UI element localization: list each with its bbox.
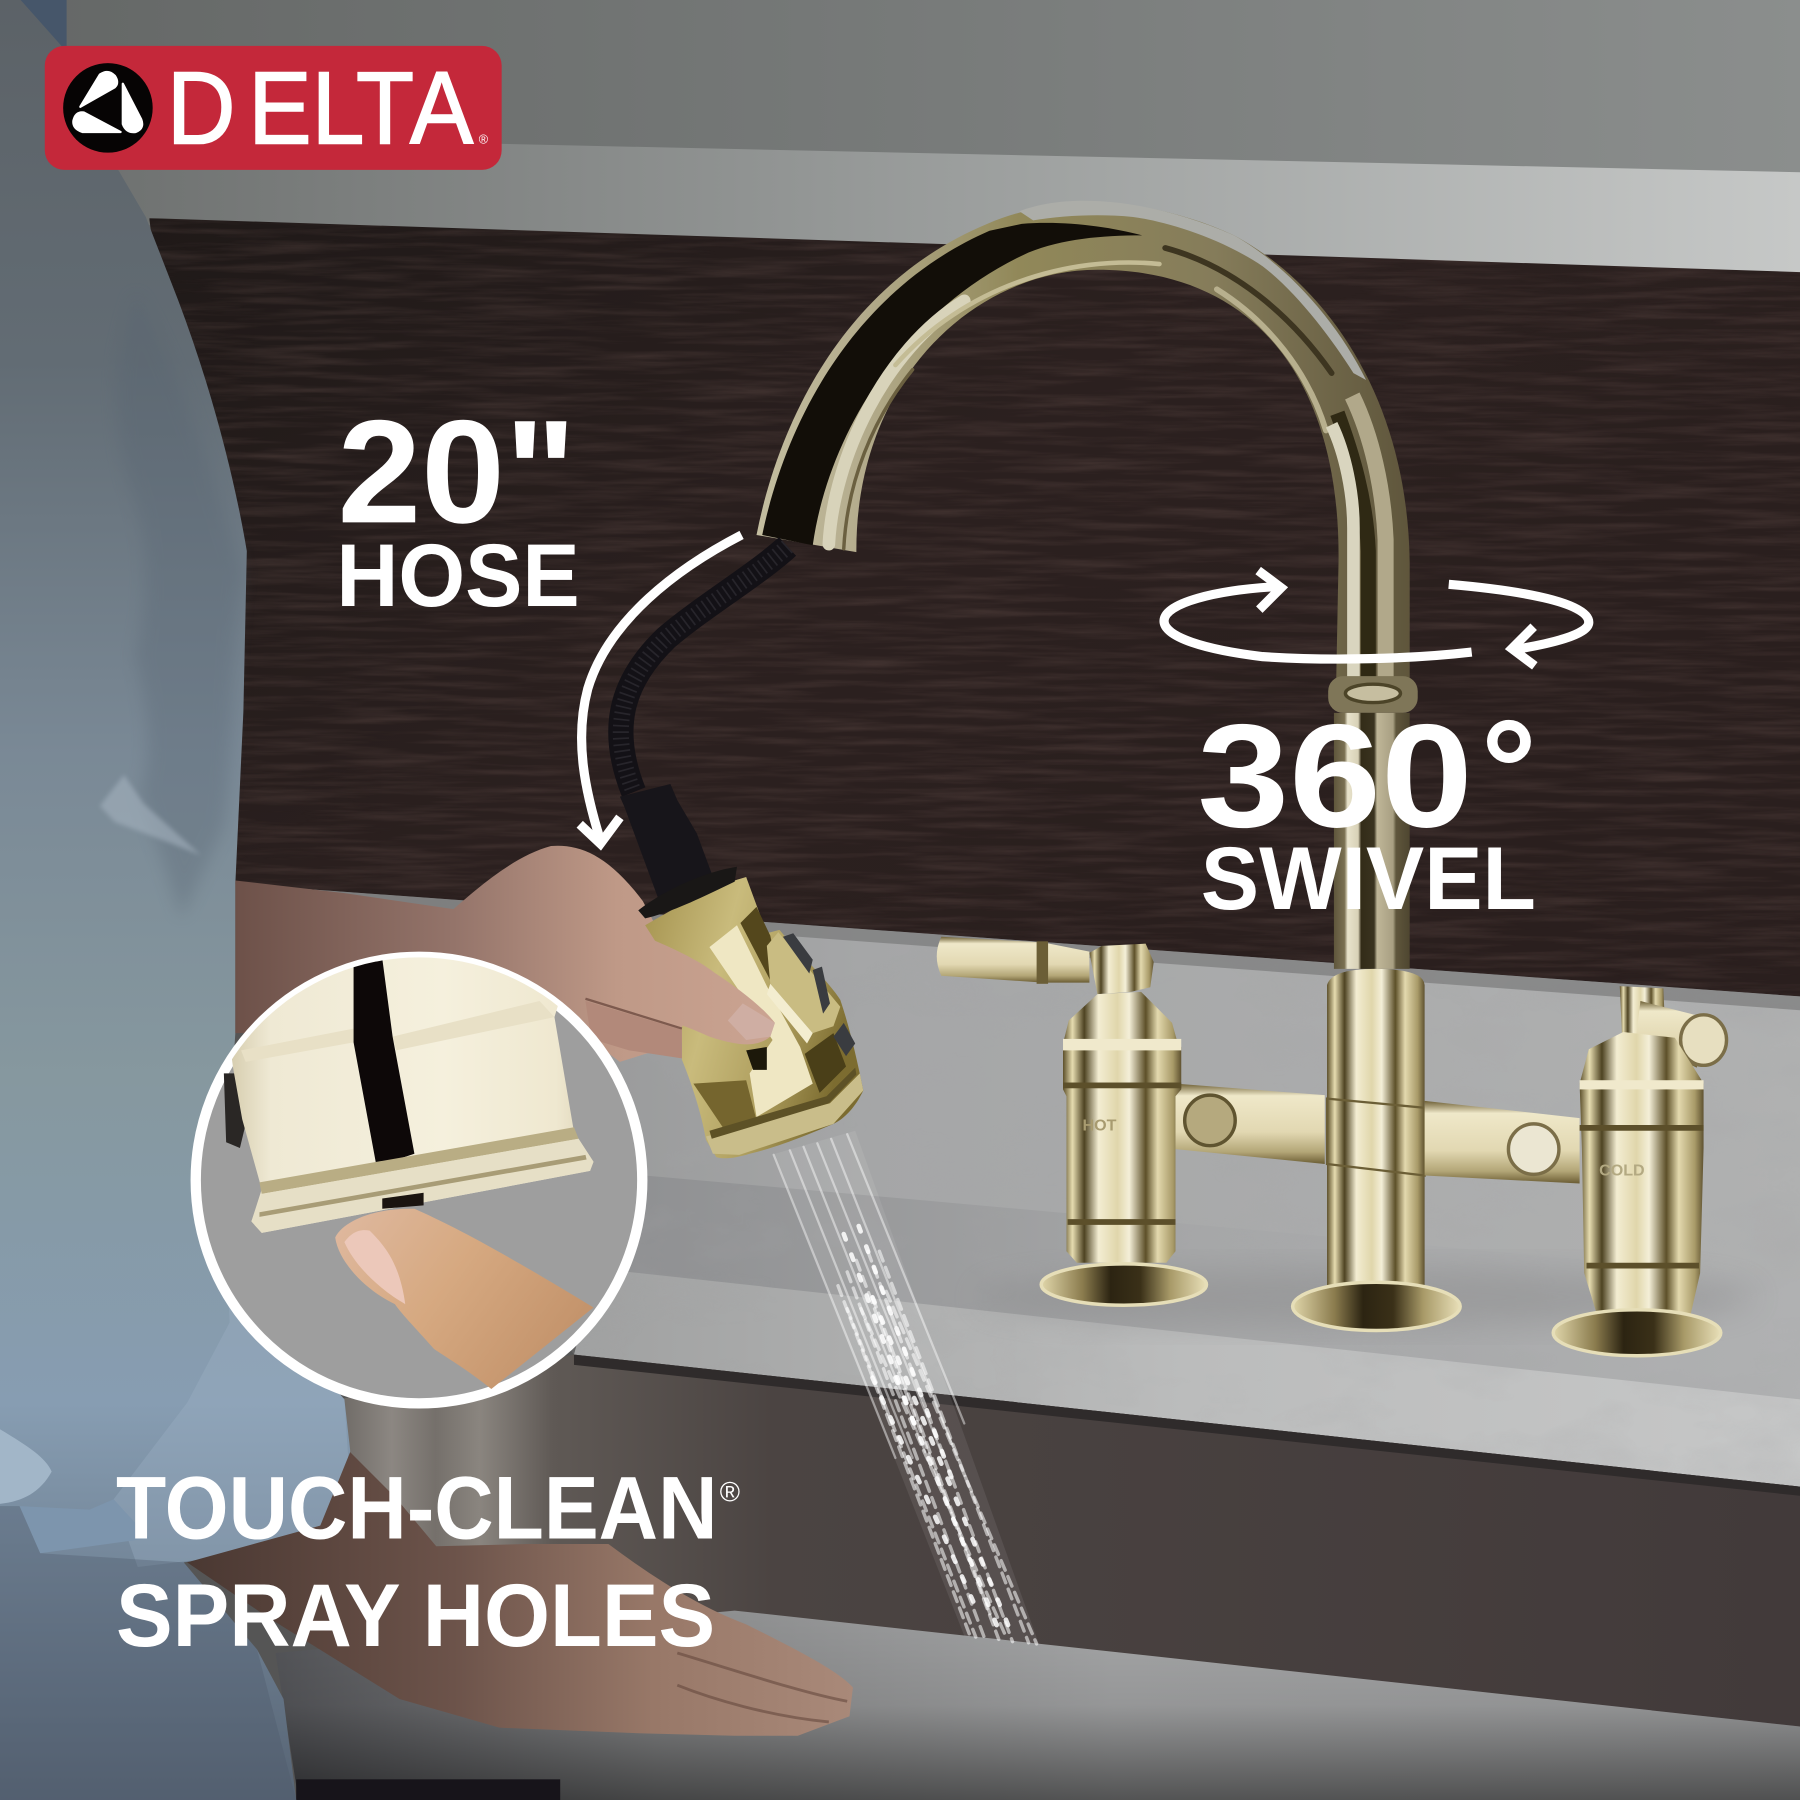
touch-clean detail circle bbox=[196, 953, 642, 1403]
faucet: right handle bbox=[1553, 986, 1727, 1356]
fingertip bbox=[335, 1209, 593, 1389]
background: steel sink bbox=[333, 1355, 1800, 1733]
upper column bbox=[1334, 713, 1410, 969]
close-up spray head bbox=[218, 953, 593, 1389]
sprayer collar disc bbox=[638, 867, 737, 918]
registered mark: ® bbox=[479, 132, 489, 146]
spout highlights bbox=[829, 248, 1332, 549]
label: 360 degree swivel: 360 bbox=[1197, 695, 1473, 859]
water spray bbox=[774, 1131, 1039, 1644]
arrow: 360 degree swivel bbox=[1164, 571, 1589, 666]
column clamp band bbox=[1327, 1099, 1425, 1176]
background: dark wood backsplash bbox=[149, 218, 1800, 999]
faucet: left handle bbox=[937, 937, 1207, 1305]
faucet: centre column and swivel spout bbox=[757, 201, 1460, 1330]
faucet: bolt left bbox=[1185, 1095, 1235, 1146]
label: 20 inch hose: HOSE bbox=[336, 525, 580, 625]
background: white molding bbox=[115, 135, 1800, 276]
fingernail bbox=[344, 1230, 405, 1304]
label: 360 degree swivel: SWIVEL bbox=[1201, 828, 1536, 928]
collar highlight bbox=[1345, 684, 1401, 703]
column stripes where the spout curves down bbox=[1332, 396, 1386, 680]
label: 360 degree swivel bbox=[1197, 690, 1537, 928]
hose bbox=[621, 546, 788, 792]
column base bbox=[1293, 1282, 1460, 1330]
buttons bbox=[783, 933, 813, 973]
faucet: right bridge arm bbox=[1425, 1101, 1580, 1184]
swivel collar bbox=[1328, 676, 1418, 713]
label: touch-clean spray holes: SPRAY HOLES bbox=[116, 1565, 715, 1665]
base ring bbox=[706, 1073, 863, 1155]
spout top light reflection bbox=[1019, 201, 1366, 380]
person: lower arm and hand on counter bbox=[187, 1452, 853, 1736]
arrow: hose pull-down bbox=[580, 535, 742, 844]
background: marble backsplash and counter bbox=[235, 884, 1800, 1487]
label: touch-clean spray holes: TOUCH-CLEAN bbox=[116, 1457, 717, 1557]
person: fingers over sprayer bbox=[574, 907, 775, 1058]
head body bbox=[645, 877, 863, 1158]
label: touch-clean spray holes bbox=[116, 1457, 740, 1665]
spout dark reflection bbox=[762, 223, 1142, 545]
lower column body bbox=[1327, 969, 1425, 1291]
logo: Delta badge bbox=[45, 46, 502, 170]
thumb nail bbox=[728, 1003, 775, 1040]
label: 20 inch hose: 20" bbox=[338, 390, 576, 554]
faucet: bolt right bbox=[1508, 1124, 1559, 1174]
logo wordmark: DELTA bbox=[167, 51, 473, 166]
spout body bbox=[757, 203, 1410, 680]
lower left band bbox=[693, 1080, 757, 1133]
background: upper wall bbox=[0, 0, 1800, 276]
side wing highlight bbox=[767, 932, 840, 1033]
logo mark bbox=[63, 63, 153, 153]
label: 20 inch hose bbox=[336, 390, 580, 625]
faucet: left bridge arm bbox=[1176, 1084, 1325, 1164]
faucet: left handle: HOT bbox=[1083, 1117, 1117, 1135]
finger crease bbox=[585, 999, 682, 1029]
lower dark strip bbox=[805, 1033, 846, 1093]
sprayer connector bbox=[620, 784, 712, 903]
person: shirt bbox=[0, 0, 350, 1800]
dark reflection strip bbox=[740, 907, 781, 985]
sprayer head bbox=[638, 867, 863, 1158]
cream reflection bbox=[709, 925, 813, 1117]
background: front marble counter bbox=[276, 1611, 1800, 1800]
label: 360 degree swivel: ° bbox=[1481, 690, 1537, 847]
person: forearm and wrist behind sprayer bbox=[235, 846, 712, 1062]
circle background and ring bbox=[196, 957, 642, 1403]
label: touch-clean spray holes: ® bbox=[720, 1477, 740, 1508]
faucet: right handle: COLD bbox=[1599, 1162, 1645, 1180]
